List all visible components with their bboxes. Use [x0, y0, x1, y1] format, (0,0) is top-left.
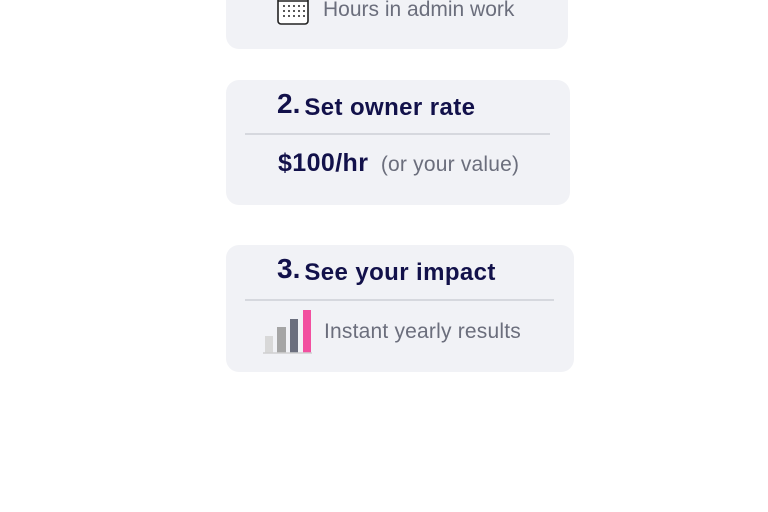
panel: step 1 card	[226, 0, 568, 49]
icon: bar chart	[263, 310, 312, 354]
panel: step 2 card	[226, 80, 570, 205]
heading: see your impact: 3.See your impact	[277, 253, 496, 286]
text: instant yearly results: Instant yearly results	[324, 320, 521, 343]
icon: calendar	[277, 0, 309, 25]
heading: set owner rate: 2.Set owner rate	[277, 88, 475, 121]
panel: step 3 card	[226, 245, 574, 372]
text: rate value: $100/hr (or your value)	[278, 149, 519, 177]
